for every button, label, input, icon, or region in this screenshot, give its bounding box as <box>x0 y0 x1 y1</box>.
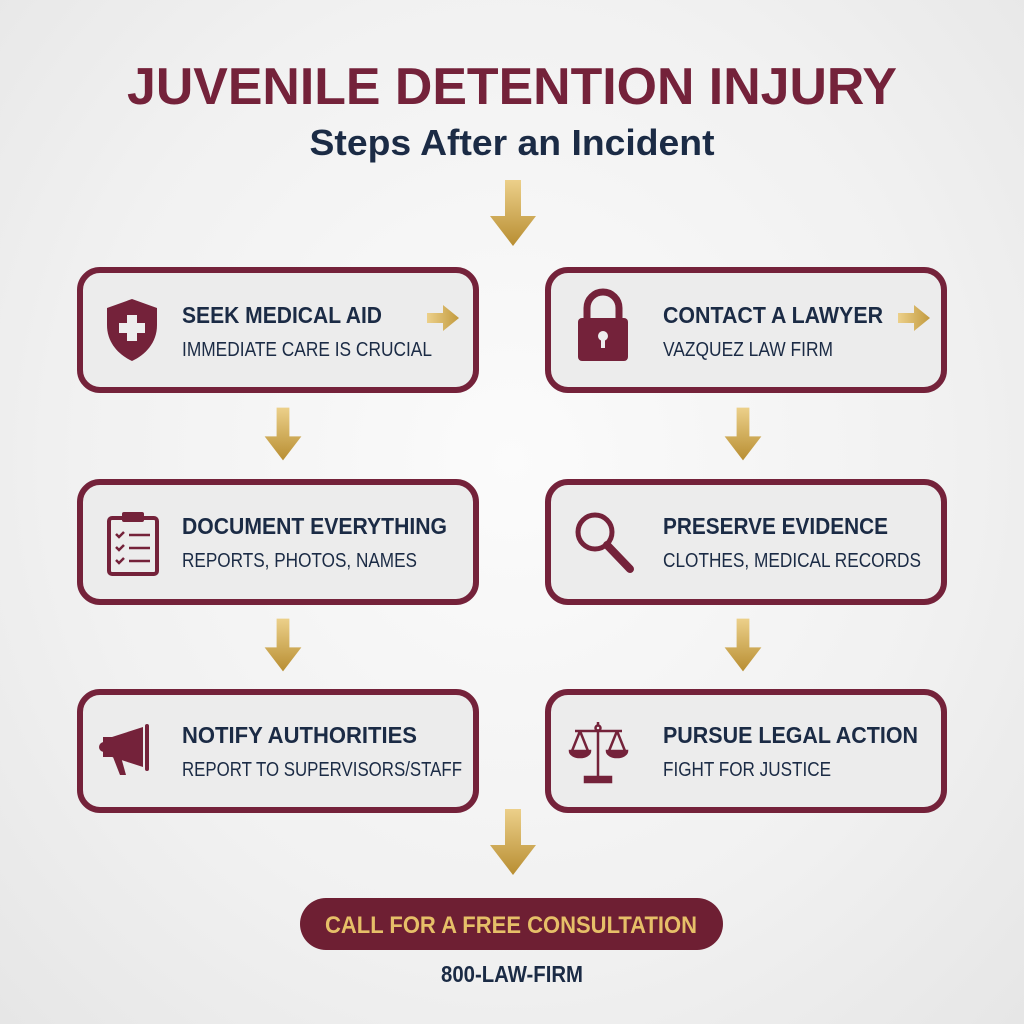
phone number: 800-LAW-FIRM <box>441 961 583 987</box>
panel: preserve evidence <box>548 482 944 602</box>
panel: pursue legal action <box>548 692 944 810</box>
text: notify authorities: REPORT TO SUPERVISORS/STAFF <box>182 759 462 781</box>
icon: padlock <box>578 292 628 361</box>
panel: notify authorities <box>80 692 476 810</box>
text: notify authorities <box>182 722 462 781</box>
text: document everything <box>182 513 447 572</box>
arrow: left row2 <box>265 619 301 671</box>
button: call for consultation <box>300 898 723 950</box>
arrow: right row1 <box>725 408 761 460</box>
arrow: bottom <box>490 809 536 875</box>
text: pursue legal action: PURSUE LEGAL ACTION <box>663 722 918 748</box>
text: seek medical aid: IMMEDIATE CARE IS CRUCIAL <box>182 339 432 361</box>
text: document everything: DOCUMENT EVERYTHING <box>182 513 447 539</box>
icon: shield <box>107 299 157 361</box>
text: contact a lawyer: CONTACT A LAWYER <box>663 302 883 328</box>
arrow: right row2 <box>725 619 761 671</box>
title: JUVENILE DETENTION INJURY <box>127 58 897 116</box>
text: preserve evidence: CLOTHES, MEDICAL RECORDS <box>663 550 921 572</box>
text: preserve evidence <box>663 513 921 572</box>
arrow: left row1 <box>265 408 301 460</box>
icon: scales <box>570 722 627 782</box>
text: contact a lawyer <box>663 302 883 361</box>
panel: document everything <box>80 482 476 602</box>
subtitle: Steps After an Incident <box>310 122 715 163</box>
arrow: right <box>427 305 459 331</box>
arrow: right <box>898 305 930 331</box>
panel: seek medical aid <box>80 270 476 390</box>
arrow: top <box>490 180 536 246</box>
text: seek medical aid <box>182 302 432 361</box>
icon: megaphone <box>99 724 149 775</box>
button: call for consultation: CALL FOR A FREE CONSULTATION <box>325 912 697 939</box>
text: pursue legal action <box>663 722 918 781</box>
text: notify authorities: NOTIFY AUTHORITIES <box>182 722 417 748</box>
icon: magnifier <box>578 515 630 569</box>
icon: clipboard <box>109 512 157 574</box>
text: document everything: REPORTS, PHOTOS, NAMES <box>182 550 417 572</box>
text: contact a lawyer: VAZQUEZ LAW FIRM <box>663 339 833 361</box>
text: seek medical aid: SEEK MEDICAL AID <box>182 302 382 328</box>
text: preserve evidence: PRESERVE EVIDENCE <box>663 513 888 539</box>
panel: contact a lawyer <box>548 270 944 390</box>
text: pursue legal action: FIGHT FOR JUSTICE <box>663 759 831 781</box>
